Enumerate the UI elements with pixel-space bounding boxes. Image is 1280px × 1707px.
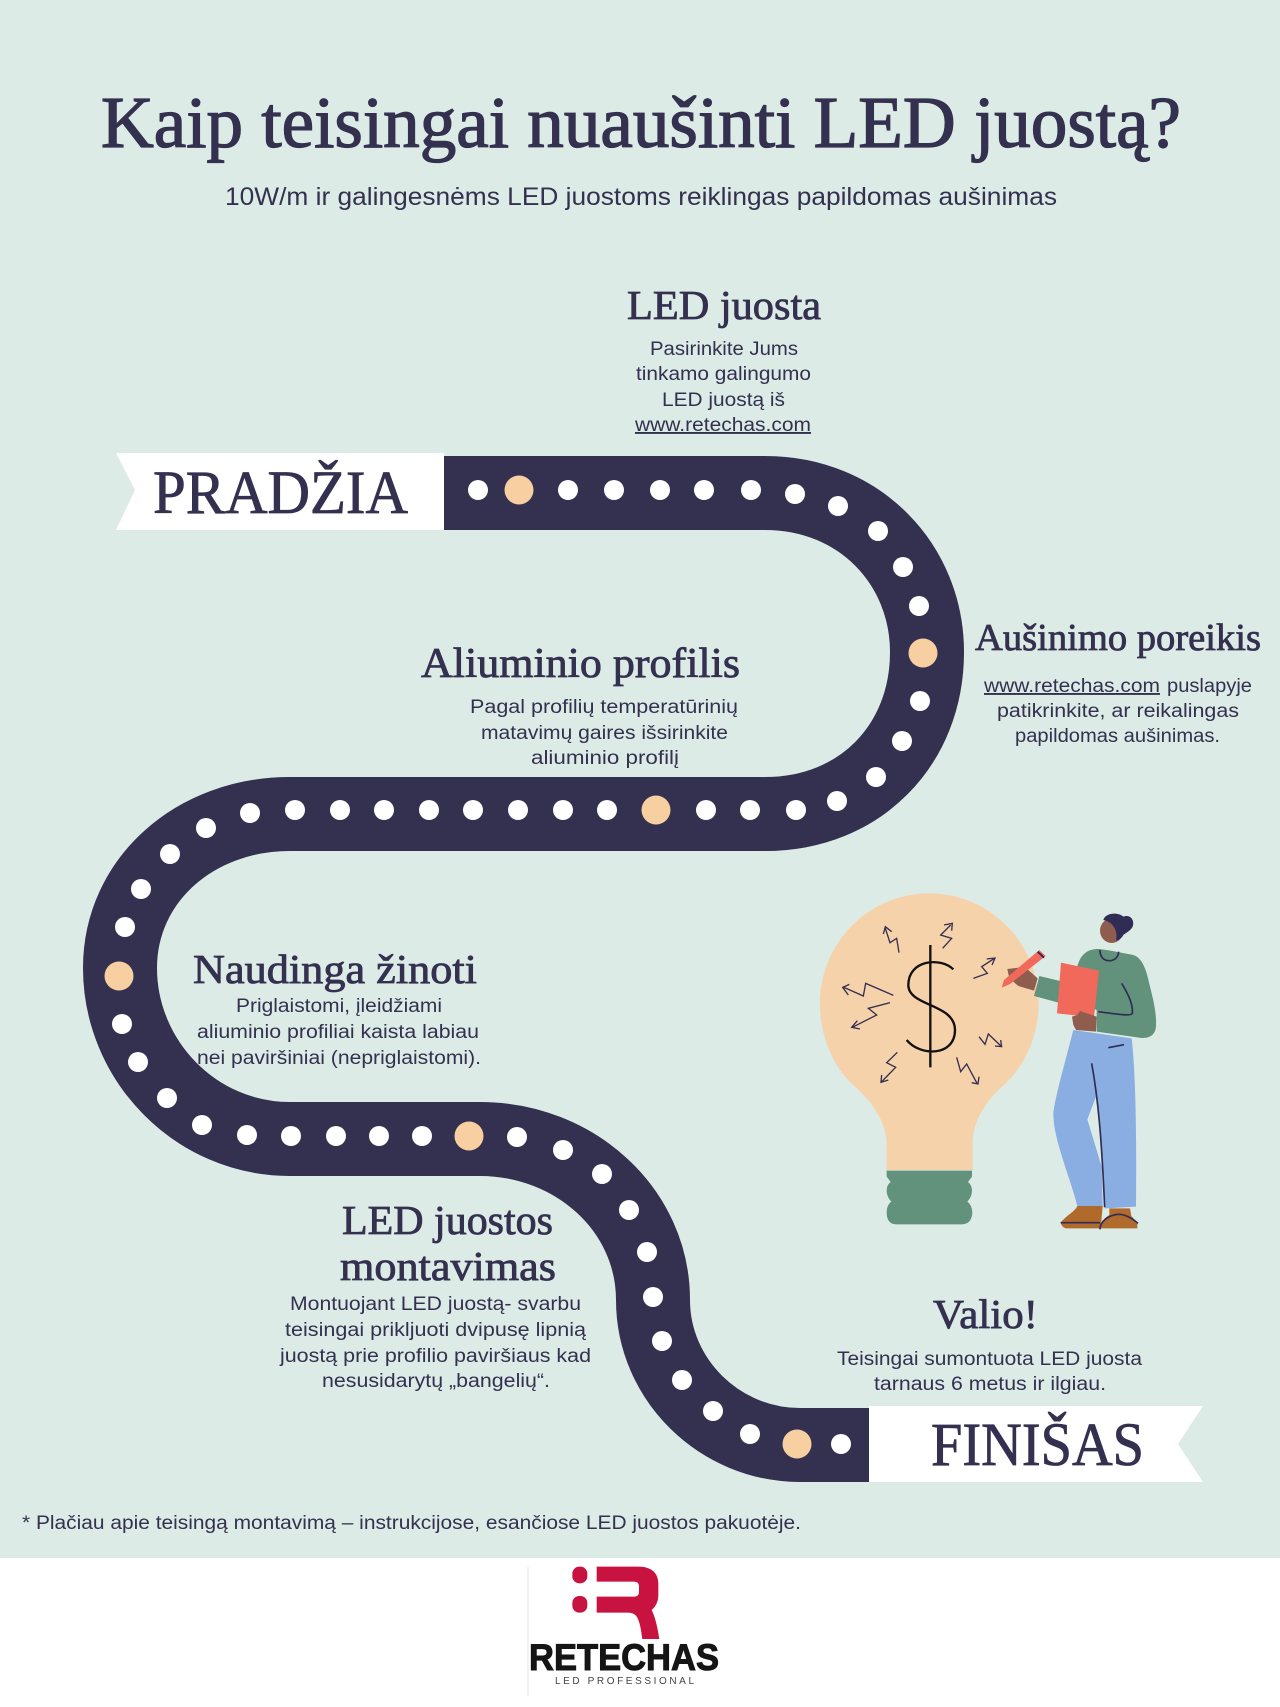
step: LED juosta: tinkamo galingumo <box>636 364 811 385</box>
illustration: person with clipboard <box>1002 914 1156 1229</box>
step: Naudinga žinoti <box>193 946 481 1069</box>
step: Aliuminio profilis: matavimų gaires išsirinkite <box>481 723 728 744</box>
road dots <box>112 480 930 1454</box>
title: Kaip teisingai nuaušinti LED juostą? <box>101 82 1181 163</box>
step: Valio: Teisingai sumontuota LED juosta <box>837 1349 1142 1370</box>
step: LED juostos montavimas: nesusidarytų „bangelių“. <box>322 1371 550 1392</box>
step: Aušinimo poreikis: patikrinkite, ar reikalingas <box>997 701 1239 722</box>
step: LED juostos montavimas: montavimas <box>340 1243 556 1289</box>
footnote: * Plačiau apie teisingą montavimą – instrukcijose, esančiose LED juostos pakuotėje. <box>22 1513 801 1534</box>
step: LED juostos montavimas: teisingai prikljuoti dvipusę lipnią <box>285 1320 586 1341</box>
step: Aliuminio profilis: Aliuminio profilis <box>421 641 740 687</box>
subtitle: 10W/m ir galingesnėms LED juostoms reiklingas papildomas aušinimas <box>225 183 1057 211</box>
step: LED juosta: Pasirinkite Jums <box>650 339 798 360</box>
step: LED juosta: www.retechas.com <box>634 415 811 436</box>
step: Aušinimo poreikis: puslapyje <box>1167 676 1252 697</box>
logo: tagline: LED PROFESSIONAL <box>555 1676 694 1687</box>
step: Aliuminio profilis: Pagal profilių temperatūrinių <box>470 697 738 718</box>
start banner: PRADŽIA <box>153 460 408 527</box>
step: LED juostos montavimas: juostą prie profilio paviršiaus kad <box>279 1346 591 1367</box>
step: Naudinga žinoti: aliuminio profiliai kaista labiau <box>197 1022 479 1043</box>
step: Aliuminio profilis: aliuminio profilį <box>531 748 679 769</box>
logo: wordmark: RETECHAS <box>529 1637 719 1678</box>
step: Aušinimo poreikis: papildomas aušinimas. <box>1015 726 1220 747</box>
finish banner: FINIŠAS <box>931 1412 1144 1479</box>
step: Valio: tarnaus 6 metus ir ilgiau. <box>874 1374 1106 1395</box>
step: Aušinimo poreikis: www.retechas.com <box>983 676 1160 697</box>
road: winding path <box>120 493 927 1445</box>
step: LED juostos montavimas: LED juostos <box>342 1197 553 1243</box>
step: LED juosta: LED juosta <box>627 282 821 328</box>
step: Naudinga žinoti: Priglaistomi, įleidžiami <box>236 996 442 1017</box>
step: LED juosta: LED juostą iš <box>662 390 785 411</box>
step: LED juosta <box>627 282 821 436</box>
step: Aliuminio profilis <box>421 641 740 769</box>
step: Naudinga žinoti: nei paviršiniai (nepriglaistomi). <box>197 1048 481 1069</box>
step: Valio: Valio! <box>933 1291 1038 1337</box>
step: Valio <box>837 1291 1142 1395</box>
step: LED juostos montavimas: Montuojant LED juostą- svarbu <box>290 1294 581 1315</box>
step: Naudinga žinoti: Naudinga žinoti <box>193 946 477 992</box>
logo: red R mark <box>572 1567 659 1639</box>
step: LED juostos montavimas <box>279 1197 591 1392</box>
milestone dots <box>104 476 938 1458</box>
step: Aušinimo poreikis: Aušinimo poreikis <box>975 617 1261 659</box>
finish banner <box>869 1406 1203 1482</box>
illustration: light bulb <box>820 893 1039 1224</box>
step: Aušinimo poreikis <box>975 617 1261 747</box>
footer band with logo <box>0 1558 1280 1707</box>
